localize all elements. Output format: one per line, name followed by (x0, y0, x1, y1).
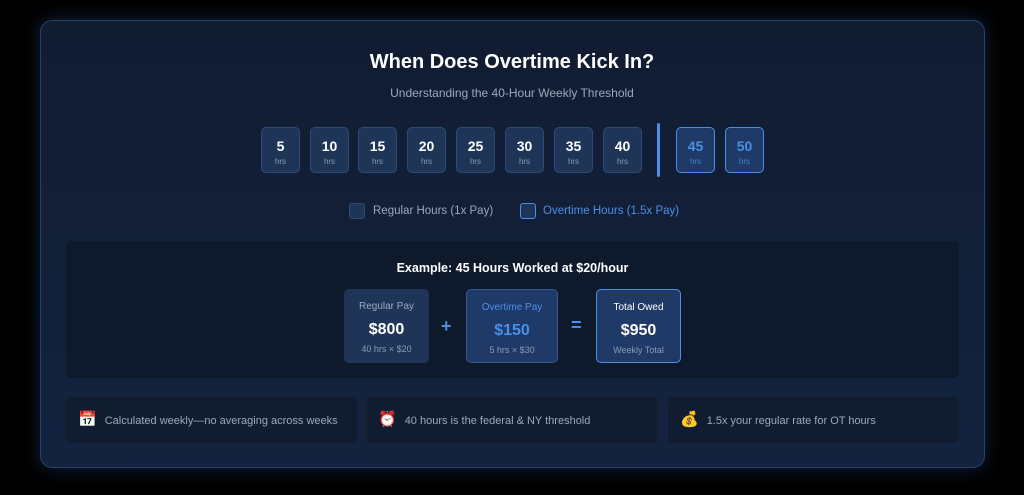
hours bar: hrs (568, 157, 579, 166)
total owed (596, 289, 681, 363)
hours bar: hrs (470, 157, 481, 166)
tip: rate (668, 397, 959, 443)
hours bar: 35 (566, 138, 581, 154)
tip: threshold: ⏰ 40 hours is the federal & NY threshold (378, 411, 590, 428)
hours bar: hrs (275, 157, 286, 166)
regular pay: Regular Pay (359, 301, 414, 312)
hours bar: hrs (519, 157, 530, 166)
hours bar: hrs (739, 157, 750, 166)
example panel: Example: 45 Hours Worked at $20/hour (397, 261, 628, 275)
hours bar: 15 (370, 138, 385, 154)
tip: weekly (66, 397, 357, 443)
hours bar: hrs (324, 157, 335, 166)
hours bar: hrs (372, 157, 383, 166)
overtime pay: Overtime Pay (482, 302, 542, 313)
hours bar: hrs (421, 157, 432, 166)
regular pay: $800 (369, 321, 404, 338)
legend (349, 203, 679, 219)
hours bar: 50 (737, 138, 752, 154)
legend: Regular Hours (1x Pay) (373, 205, 493, 217)
hours bar: 40 (615, 138, 630, 154)
plus: + (441, 316, 452, 336)
tip: threshold (366, 397, 658, 443)
hours bar: 45 (688, 138, 703, 154)
hours bar: hrs (617, 157, 628, 166)
overtime pay (466, 289, 558, 363)
hours bar: 30 (517, 138, 532, 154)
hours bar: 25 (468, 138, 483, 154)
hours bar: 10 (322, 138, 337, 154)
tip: weekly: 📅 Calculated weekly—no averaging across weeks (78, 411, 338, 428)
tip: rate: 💰 1.5x your regular rate for OT hours (680, 411, 876, 428)
hours bar: hrs (690, 157, 701, 166)
example panel (66, 241, 959, 378)
hours bar: 20 (419, 138, 434, 154)
subtitle: Understanding the 40-Hour Weekly Threshold (390, 86, 634, 100)
overtime pay: $150 (494, 322, 530, 339)
regular pay: 40 hrs × $20 (361, 344, 412, 354)
hours bar (261, 123, 764, 177)
equals: = (571, 315, 582, 335)
legend: Overtime Hours (1.5x Pay) (543, 205, 679, 217)
total owed: Total Owed (613, 302, 664, 313)
total owed: $950 (621, 322, 656, 339)
hours bar: 5 (277, 138, 284, 154)
total owed: Weekly Total (613, 345, 664, 355)
title: When Does Overtime Kick In? (370, 51, 654, 73)
regular pay (344, 289, 429, 363)
overtime pay: 5 hrs × $30 (489, 345, 535, 355)
